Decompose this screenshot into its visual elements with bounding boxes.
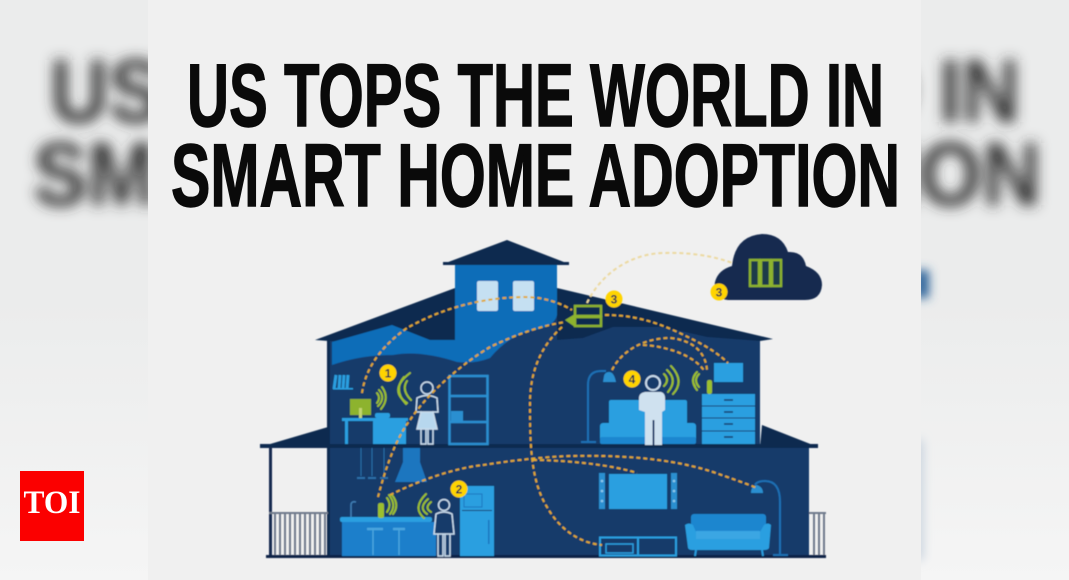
badge 3 attic	[606, 290, 622, 308]
badge 1: 1	[385, 366, 392, 380]
porch railings	[269, 512, 826, 556]
house illustration	[260, 234, 826, 558]
dashed connection lines	[362, 297, 757, 545]
TOI logo	[20, 471, 84, 541]
badge 2	[450, 480, 468, 498]
badge 3 cloud: 3	[716, 286, 723, 300]
badge 4	[624, 370, 640, 388]
kitchen	[340, 448, 494, 556]
center panel	[148, 0, 921, 580]
badge 4: 4	[629, 372, 636, 386]
badge 3 attic: 3	[611, 292, 618, 306]
TOI logo: TOI	[24, 485, 80, 521]
ground line	[266, 555, 826, 558]
upstairs office furniture	[333, 375, 488, 444]
wifi signal arcs	[377, 366, 699, 518]
cloud with servers	[715, 234, 822, 300]
ground floor living room	[599, 473, 788, 556]
badge 1	[380, 364, 396, 382]
house structure	[260, 240, 818, 557]
upstairs living room furniture	[581, 363, 755, 444]
badge 2: 2	[456, 482, 463, 496]
man upstairs	[639, 376, 665, 445]
title	[171, 45, 900, 225]
attic router device	[565, 306, 601, 327]
badge 3 cloud	[710, 284, 728, 300]
dashed link to cloud	[587, 253, 743, 303]
woman upstairs	[416, 382, 438, 444]
routers	[378, 380, 712, 518]
woman in kitchen	[434, 500, 454, 556]
